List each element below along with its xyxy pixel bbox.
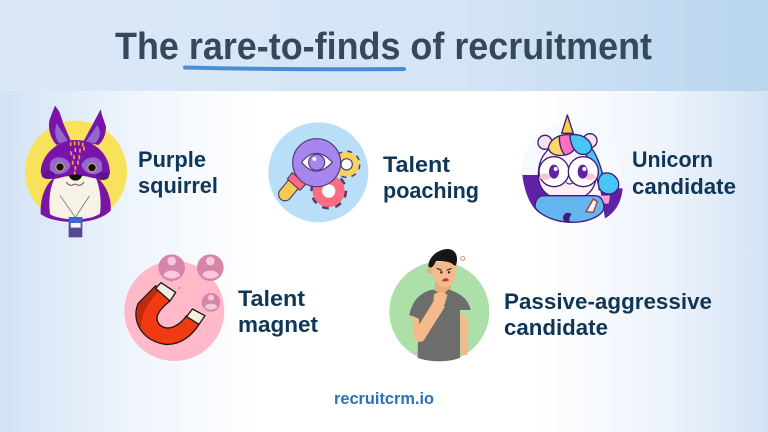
label: Unicorn candidate: Unicorn (632, 147, 713, 172)
icon: magnifier and gears (268, 122, 368, 222)
label: Passive-aggressive candidate: candidate (504, 315, 608, 340)
label: Passive-aggressive candidate (504, 289, 712, 340)
label: Talent magnet: magnet (238, 312, 319, 337)
label: Purple squirrel (138, 147, 218, 198)
label: Talent poaching (383, 152, 479, 203)
label: Unicorn candidate (632, 147, 736, 199)
item: talent poaching (268, 122, 479, 222)
label: Passive-aggressive candidate: Passive-aggressive (504, 289, 712, 314)
label: Talent poaching: poaching (383, 178, 479, 203)
footer url: recruitcrm.io (334, 390, 434, 408)
item: talent magnet (124, 254, 319, 361)
header band (0, 0, 768, 91)
icon: frowning man (389, 249, 489, 362)
item: unicorn candidate (522, 115, 736, 223)
label: Talent magnet: Talent (238, 286, 306, 311)
icon: purple squirrel (25, 106, 127, 237)
item: passive-aggressive candidate (389, 249, 712, 362)
label: Talent magnet (238, 286, 319, 337)
icon: unicorn at laptop (522, 115, 623, 223)
label: Talent poaching: Talent (383, 152, 451, 177)
icon: magnet attracting people (124, 254, 224, 361)
label: Purple squirrel: squirrel (138, 173, 218, 198)
label: Purple squirrel: Purple (138, 147, 206, 172)
item: purple squirrel (25, 106, 218, 237)
title: The rare-to-finds of recruitment (115, 26, 652, 68)
label: Unicorn candidate: candidate (632, 174, 736, 199)
